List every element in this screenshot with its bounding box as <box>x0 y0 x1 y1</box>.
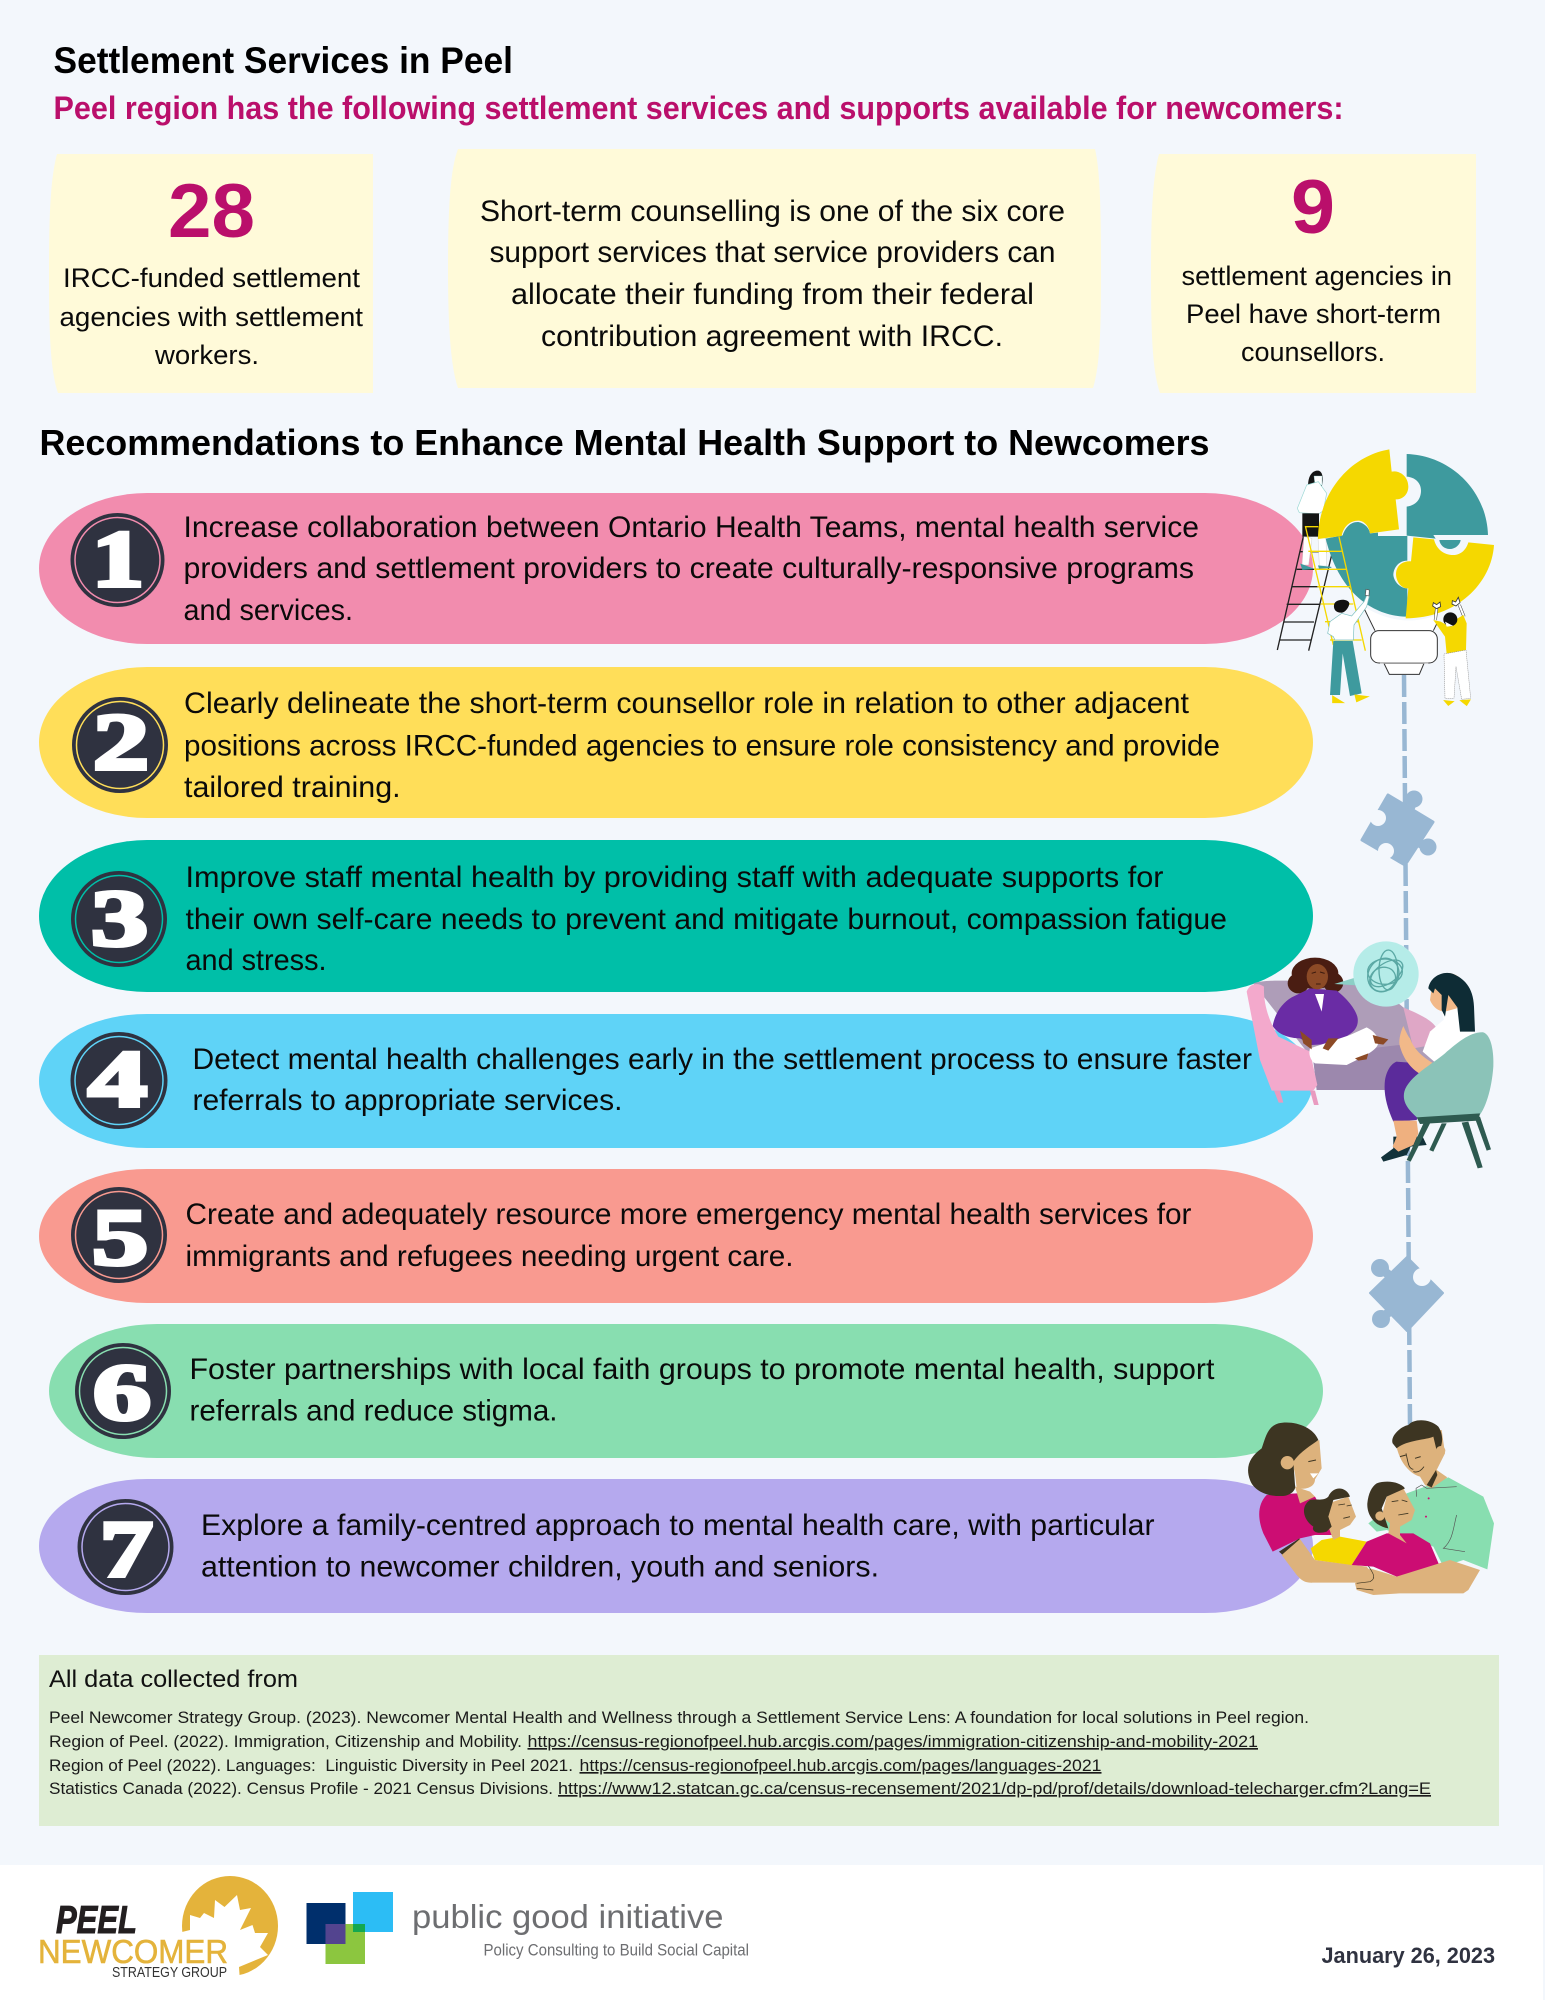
recommendation 3 <box>39 840 1313 992</box>
badge 2 <box>72 697 168 793</box>
sources list: Peel Newcomer Strategy Group. (2023). Newcomer Mental Health and Wellness through a Settlement Service Lens: A foundation for local solutions in Peel region. <box>49 1709 1309 1727</box>
panel text <box>480 195 1065 353</box>
badge 1 <box>70 513 164 607</box>
puzzle yellow bottom right <box>1396 537 1494 618</box>
person with teal trousers <box>1328 589 1369 703</box>
person with yellow shirt <box>1433 597 1471 705</box>
logo: Peel Newcomer Strategy Group: NEWCOMER <box>38 1933 228 1970</box>
icon: puzzle piece lower <box>1370 1257 1443 1331</box>
stat description: Peel have short-term <box>1186 299 1441 329</box>
recommendation 3 text: their own self-care needs to prevent and mitigate burnout, compassion fatigue <box>186 903 1227 936</box>
illustration: puzzle light bulb with people <box>1277 449 1494 705</box>
dashed connector line <box>1404 675 1410 1425</box>
panel: 9 agencies <box>1151 154 1476 393</box>
recommendation 1 <box>39 493 1313 644</box>
sources list: https://census-regionofpeel.hub.arcgis.com/pages/immigration-citizenship-and-mobility-2021 <box>528 1733 1258 1751</box>
logo: Peel Newcomer Strategy Group: PEEL <box>56 1899 137 1942</box>
stat: 9: 9 <box>1291 165 1335 250</box>
recommendation 7 <box>39 1479 1313 1613</box>
recommendation 2 text: tailored training. <box>184 771 401 804</box>
boy <box>1352 1482 1441 1577</box>
panel text: contribution agreement with IRCC. <box>541 320 1003 353</box>
father shirt <box>1368 1477 1494 1569</box>
puzzle teal top right <box>1407 454 1488 539</box>
recommendation 2 text <box>184 687 1220 804</box>
yellow ladder <box>1305 526 1365 651</box>
date: January 26, 2023 <box>1322 1943 1495 1968</box>
recommendation 6 text: Foster partnerships with local faith groups to promote mental health, support <box>190 1353 1215 1386</box>
puzzle teal bottom left <box>1326 522 1407 617</box>
recommendation 4 text <box>192 1043 1252 1117</box>
footer band <box>0 1865 1543 2000</box>
stat description: agencies with settlement <box>60 302 364 332</box>
illustration: counselling session <box>1247 941 1493 1168</box>
logo: Peel Newcomer Strategy Group: STRATEGY GROUP <box>112 1965 227 1981</box>
panel: short-term counselling <box>448 149 1101 388</box>
logo: Peel Newcomer Strategy Group <box>38 1876 278 1982</box>
sources list: Region of Peel. (2022). Immigration, Citizenship and Mobility. <box>49 1733 522 1751</box>
woman on ladder <box>1297 471 1331 569</box>
counsellor and chair <box>1381 973 1493 1168</box>
recommendation 1 text: Increase collaboration between Ontario Health Teams, mental health service <box>184 511 1199 544</box>
badge 5: 5 <box>92 1194 148 1282</box>
thought bubble with scribble <box>1334 941 1419 1007</box>
recommendation 5 text: immigrants and refugees needing urgent care. <box>186 1240 794 1273</box>
panel: 28 agencies <box>49 154 373 393</box>
recommendation 6 text: referrals and reduce stigma. <box>190 1394 558 1428</box>
panel text: Short-term counselling is one of the six core <box>480 195 1065 228</box>
panel text: allocate their funding from their federal <box>511 278 1034 311</box>
sources list <box>49 1709 1431 1798</box>
logo: public good initiative: public good initiative <box>412 1898 724 1935</box>
subtitle: Peel region has the following settlement services and supports available for newcomers: <box>54 90 1344 126</box>
heading: recommendations: Recommendations to Enhance Mental Health Support to Newcomers <box>40 422 1210 463</box>
illustration: family <box>1248 1420 1494 1595</box>
badge 7: 7 <box>100 1506 153 1594</box>
black ladder <box>1277 537 1332 651</box>
stat: 28: 28 <box>168 169 255 254</box>
bulb neck and base <box>1364 607 1437 674</box>
logo: public good initiative: Policy Consulting to Build Social Capital <box>484 1942 749 1960</box>
stat description <box>1182 261 1452 367</box>
recommendation 5 text <box>186 1198 1192 1273</box>
recommendation 4 <box>39 1014 1313 1148</box>
badge 4: 4 <box>88 1036 147 1124</box>
seated client <box>1273 958 1388 1065</box>
stat description: IRCC-funded settlement <box>63 263 361 293</box>
recommendation 5 text: Create and adequately resource more emergency mental health services for <box>186 1198 1192 1231</box>
recommendation 5 <box>39 1169 1313 1303</box>
badge 1: 1 <box>92 516 144 604</box>
recommendation 6 <box>49 1324 1323 1458</box>
sources list: Region of Peel (2022). Languages: Linguistic Diversity in Peel 2021. <box>49 1757 573 1775</box>
recommendation 4 text: Detect mental health challenges early in the settlement process to ensure faster <box>192 1043 1252 1076</box>
badge 3 <box>71 871 167 967</box>
stat description: settlement agencies in <box>1182 261 1452 291</box>
panel text: support services that service providers can <box>490 236 1056 269</box>
girl <box>1304 1489 1367 1565</box>
badge 6 <box>75 1343 171 1439</box>
recommendation 7 text <box>201 1509 1155 1584</box>
badge 6: 6 <box>93 1349 151 1437</box>
recommendation 7 text: Explore a family-centred approach to mental health care, with particular <box>201 1509 1155 1542</box>
puzzle yellow top left <box>1318 449 1408 539</box>
recommendation 4 text: referrals to appropriate services. <box>192 1084 622 1117</box>
panel: sources <box>39 1655 1499 1826</box>
badge 4 <box>70 1032 168 1129</box>
recommendation 1 text <box>184 511 1199 627</box>
recommendation 3 text <box>186 861 1227 977</box>
stat description: counsellors. <box>1241 337 1385 367</box>
recommendation 3 text: and stress. <box>186 944 326 977</box>
stat description <box>60 263 364 370</box>
sources list: https://www12.statcan.gc.ca/census-recensement/2021/dp-pd/prof/details/download-telecharger.cfm?Lang=E <box>558 1780 1431 1798</box>
logo: public good initiative <box>306 1892 749 1964</box>
mother <box>1248 1422 1375 1583</box>
stat description: workers. <box>154 340 259 370</box>
recommendation 3 text: Improve staff mental health by providing staff with adequate supports for <box>186 861 1164 894</box>
title: Settlement Services in Peel <box>54 40 513 81</box>
sources heading: All data collected from <box>49 1666 298 1693</box>
recommendation 1 text: providers and settlement providers to create culturally-responsive programs <box>184 552 1194 585</box>
recommendation 1 text: and services. <box>184 594 353 627</box>
father arm and hands <box>1355 1560 1480 1595</box>
recommendation 2 text: positions across IRCC-funded agencies to ensure role consistency and provide <box>184 730 1220 762</box>
badge 2: 2 <box>93 699 149 787</box>
father head <box>1392 1420 1465 1552</box>
recommendation 7 text: attention to newcomer children, youth and seniors. <box>201 1550 879 1584</box>
badge 3: 3 <box>91 875 148 963</box>
sources list: Statistics Canada (2022). Census Profile - 2021 Census Divisions. <box>49 1780 553 1798</box>
sources list: https://census-regionofpeel.hub.arcgis.com/pages/languages-2021 <box>580 1757 1102 1775</box>
badge 5 <box>71 1187 167 1283</box>
recommendation 6 text <box>190 1353 1215 1428</box>
badge 7 <box>78 1499 174 1595</box>
recommendation 2 <box>39 667 1313 818</box>
recommendation 2 text: Clearly delineate the short-term counsellor role in relation to other adjacent <box>184 687 1190 720</box>
icon: puzzle piece upper <box>1362 790 1436 865</box>
sofa <box>1247 981 1436 1105</box>
